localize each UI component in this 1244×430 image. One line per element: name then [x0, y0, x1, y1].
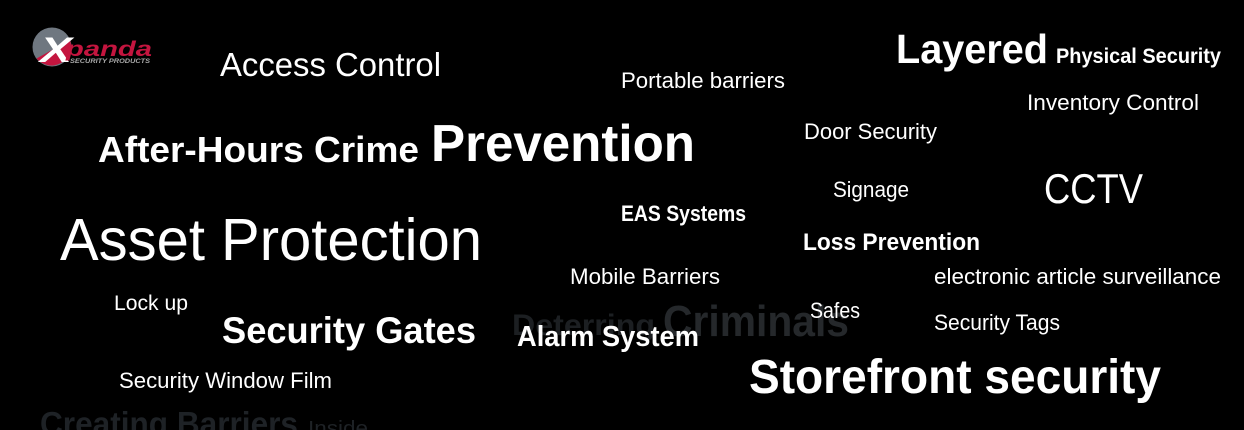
logo: Xpanda Security Products: panda [65, 38, 152, 61]
term: Security Gates: Security Gates [222, 310, 476, 351]
heading: After-Hours Crime Prevention: Prevention [431, 115, 695, 173]
term: Security Window Film: Security Window Film [119, 368, 332, 393]
heading: After-Hours Crime Prevention [98, 115, 695, 173]
heading: Layered Physical Security [896, 26, 1221, 72]
term: Safes: Safes [810, 298, 860, 323]
faded phrase: Deterring Criminals: Criminals [663, 297, 849, 346]
term: Access Control: Access Control [220, 46, 441, 83]
term: Lock up: Lock up [114, 292, 188, 315]
term: Asset Protection: Asset Protection [60, 207, 482, 273]
logo: Xpanda Security Products: SECURITY PRODUCTS [70, 58, 151, 65]
faded phrase: Deterring Criminals [512, 297, 849, 346]
term: EAS Systems: EAS Systems [621, 201, 746, 226]
heading: Layered Physical Security: Physical Security [1056, 45, 1221, 68]
term: electronic article surveillance: electronic article surveillance [934, 264, 1221, 289]
term: Portable barriers: Portable barriers [621, 68, 785, 93]
term: Security Tags: Security Tags [934, 310, 1060, 335]
faded phrase: Deterring Criminals: Deterring [512, 309, 655, 342]
term: Inventory Control: Inventory Control [1027, 90, 1199, 115]
term: Storefront security: Storefront security [749, 351, 1161, 404]
term: Mobile Barriers: Mobile Barriers [570, 264, 720, 289]
logo: Xpanda Security Products [32, 28, 152, 70]
heading: Layered Physical Security: Layered [896, 26, 1048, 72]
term: CCTV: CCTV [1044, 165, 1143, 212]
term: Signage: Signage [833, 177, 909, 202]
logo: Xpanda Security Products: X [37, 31, 76, 70]
term: Door Security: Door Security [804, 119, 937, 144]
term: Alarm System: Alarm System [517, 321, 699, 353]
heading: After-Hours Crime Prevention: After-Hours Crime [98, 129, 419, 170]
term: Loss Prevention: Loss Prevention [803, 229, 980, 256]
